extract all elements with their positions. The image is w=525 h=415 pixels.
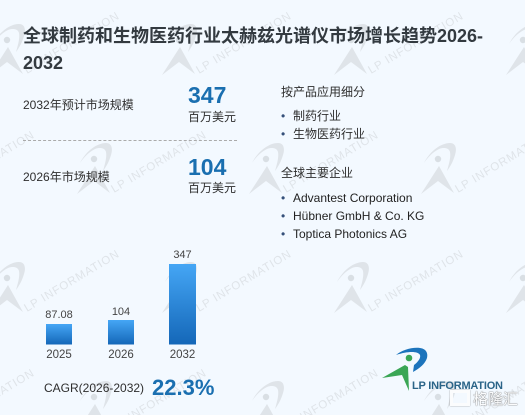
bar: 2032: 347 (173, 249, 192, 261)
label: 2032 market size: 2032年预计市场规模 (23, 98, 134, 112)
list: key companies: • (281, 227, 285, 241)
heading: key companies: 全球主要企业 (281, 166, 353, 180)
CAGR value: 22.3% (152, 375, 214, 400)
source watermark: Gelonghui (449, 389, 518, 408)
list: key companies: Advantest Corporation (293, 191, 412, 205)
list: key companies: • (281, 191, 285, 205)
source watermark: Gelonghui: 格隆汇 (473, 391, 518, 408)
heading: application segments: 按产品应用细分 (281, 85, 365, 99)
watermark pattern: LP INFORMATION (194, 249, 293, 315)
bar: 2025: 2025 (46, 349, 72, 361)
list: key companies (281, 191, 424, 241)
watermark pattern: LP INFORMATION (109, 130, 208, 196)
list: key companies: Toptica Photonics AG (293, 227, 407, 241)
list: application segments: • (281, 127, 285, 141)
label: 2026 market size: 2026年市场规模 (23, 170, 110, 184)
logo: LP Information: LP INFORMATION (412, 380, 503, 392)
list: application segments (281, 109, 365, 141)
title: 全球制药和生物医药行业太赫兹光谱仪市场增长趋势2026- (23, 26, 483, 46)
list: application segments: 制药行业 (293, 109, 341, 123)
watermark pattern: LP INFORMATION (22, 11, 121, 77)
watermark pattern: LP INFORMATION (366, 249, 465, 315)
bar: 2032: 2032 (170, 349, 195, 361)
title (23, 26, 483, 73)
watermark pattern: LP INFORMATION (194, 11, 293, 77)
watermark pattern: LP INFORMATION (22, 249, 121, 315)
title: 2032 (23, 53, 63, 73)
list: key companies: Hübner GmbH & Co. KG (293, 209, 424, 223)
watermark pattern: LP INFORMATION (366, 11, 465, 77)
watermark pattern: LP INFORMATION (281, 130, 380, 196)
bar: 2025 (45, 309, 73, 361)
bar: 2025: 87.08 (45, 309, 73, 321)
list: key companies: • (281, 209, 285, 223)
bar: 2032 (169, 249, 196, 361)
list: application segments: 生物医药行业 (293, 127, 365, 141)
unit: 2026 market size: 百万美元 (188, 181, 236, 195)
bar: 2026 (108, 306, 134, 361)
bar: 2026: 104 (112, 306, 130, 318)
unit: 2032 market size: 百万美元 (188, 110, 236, 124)
list: application segments: • (281, 109, 285, 123)
CAGR label: CAGR(2026-2032) (44, 381, 144, 395)
bar: 2026: 2026 (108, 349, 134, 361)
value: 2032 market size: 347 (188, 82, 226, 108)
value: 2026 market size: 104 (188, 154, 226, 180)
divider (23, 140, 237, 141)
